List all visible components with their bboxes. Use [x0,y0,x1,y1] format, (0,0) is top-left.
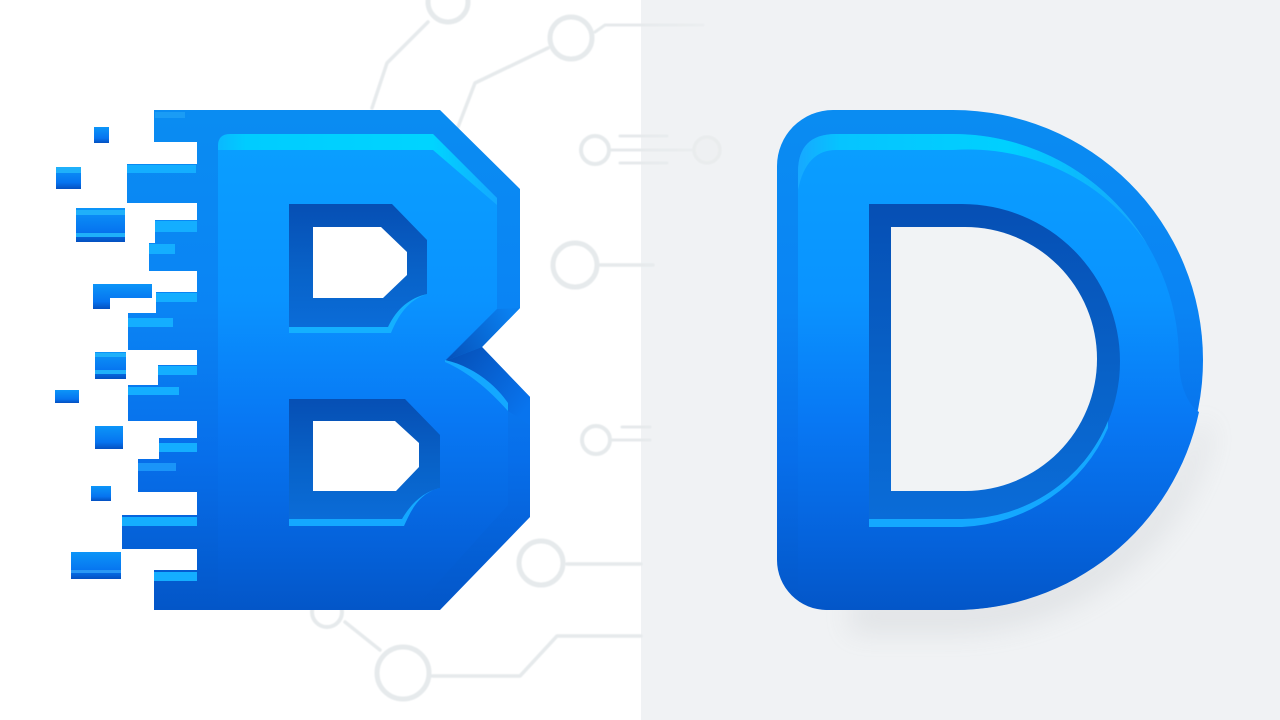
D counter hole [891,227,1097,491]
D counter highlight [869,421,1108,527]
B upper counter highlight [289,294,427,333]
D drop shadow [850,420,1210,632]
B top edge highlight [218,134,497,205]
B notch highlight [445,360,508,411]
D front face [798,134,1199,610]
D body outer silhouette [777,110,1203,610]
B fragment highlights [56,167,126,573]
B lower counter hole [313,421,419,491]
B flying pixel fragments [55,127,152,579]
B upper counter recess [289,204,427,327]
B body outer silhouette [122,110,530,610]
B lower counter highlight [289,488,440,526]
B notch upper shading [445,308,520,361]
B front face [218,134,508,610]
background: left white panel [0,0,641,720]
B dissolve bar highlights [122,112,197,581]
D top edge highlight [798,134,1147,244]
B lower counter recess [289,399,440,519]
B notch lower shading [445,347,530,425]
background: right grey panel [641,0,1280,720]
B upper counter hole [313,227,407,298]
circuit lines decoration [312,0,720,699]
D counter recess [869,204,1120,519]
letter D [777,110,1210,632]
letter B with pixel dissolve [55,110,530,610]
